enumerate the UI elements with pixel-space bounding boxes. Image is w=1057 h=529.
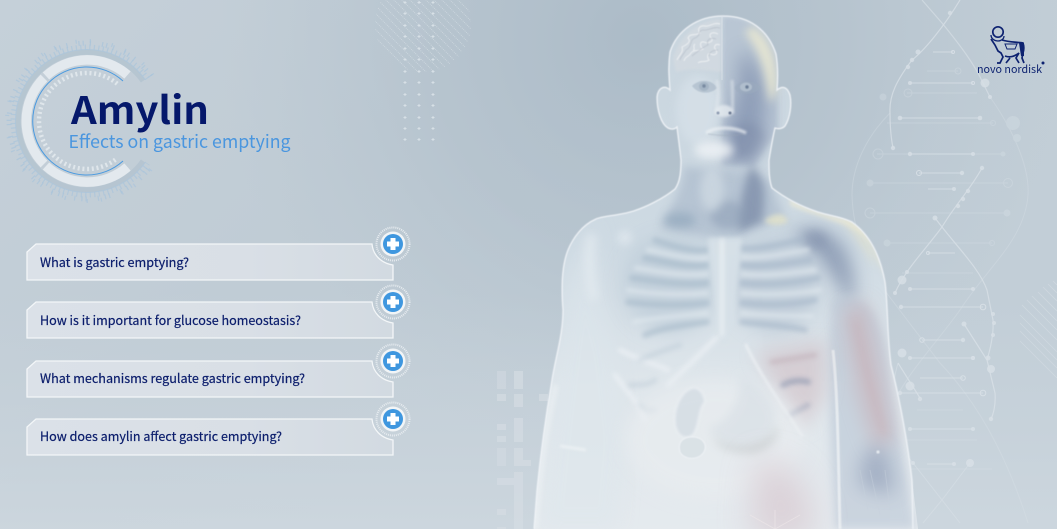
question text 2: How is it important for glucose homeostasis? <box>40 310 301 329</box>
lower ribs and costal arch <box>616 338 828 422</box>
faint strands <box>852 68 1028 523</box>
expand icon 2 <box>376 286 410 318</box>
brain <box>676 22 720 64</box>
question text 1: What is gastric emptying? <box>40 252 189 271</box>
logo wordmark: novo nordisk <box>977 62 1042 77</box>
neck and upper chest shading <box>660 165 886 305</box>
question card 4 <box>27 402 410 455</box>
head shading <box>676 17 778 165</box>
subtitle: Effects on gastric emptying <box>68 128 290 154</box>
question card 1 <box>27 228 410 280</box>
abdominal organs <box>643 393 818 529</box>
decorative hatched circle and cross grid <box>375 0 471 141</box>
HUD ring emblem <box>7 41 152 201</box>
expand icon 1 <box>376 228 410 260</box>
body outline <box>534 16 913 529</box>
helix nodes <box>891 11 996 467</box>
arms <box>535 222 915 529</box>
face <box>692 80 761 159</box>
midline of head <box>722 17 723 80</box>
upper left strand <box>890 0 960 148</box>
question text 4: How does amylin affect gastric emptying? <box>40 426 282 445</box>
decorative square blocks <box>497 371 548 529</box>
expand icon 4 <box>376 402 410 436</box>
registered mark <box>1042 62 1044 64</box>
decorative hatching right <box>1020 281 1057 378</box>
question card 2 <box>27 286 410 338</box>
question card 3 <box>27 344 410 397</box>
DNA helix decoration <box>852 0 1028 523</box>
illustration: translucent human body <box>534 16 918 529</box>
expand icon 3 <box>376 344 410 378</box>
ribcage <box>622 237 820 345</box>
question text 3: What mechanisms regulate gastric emptying? <box>40 368 305 387</box>
logo icon: bull <box>991 27 1024 63</box>
logo: novo nordisk <box>977 27 1044 77</box>
rungs <box>900 52 983 464</box>
title: Amylin <box>70 80 209 135</box>
